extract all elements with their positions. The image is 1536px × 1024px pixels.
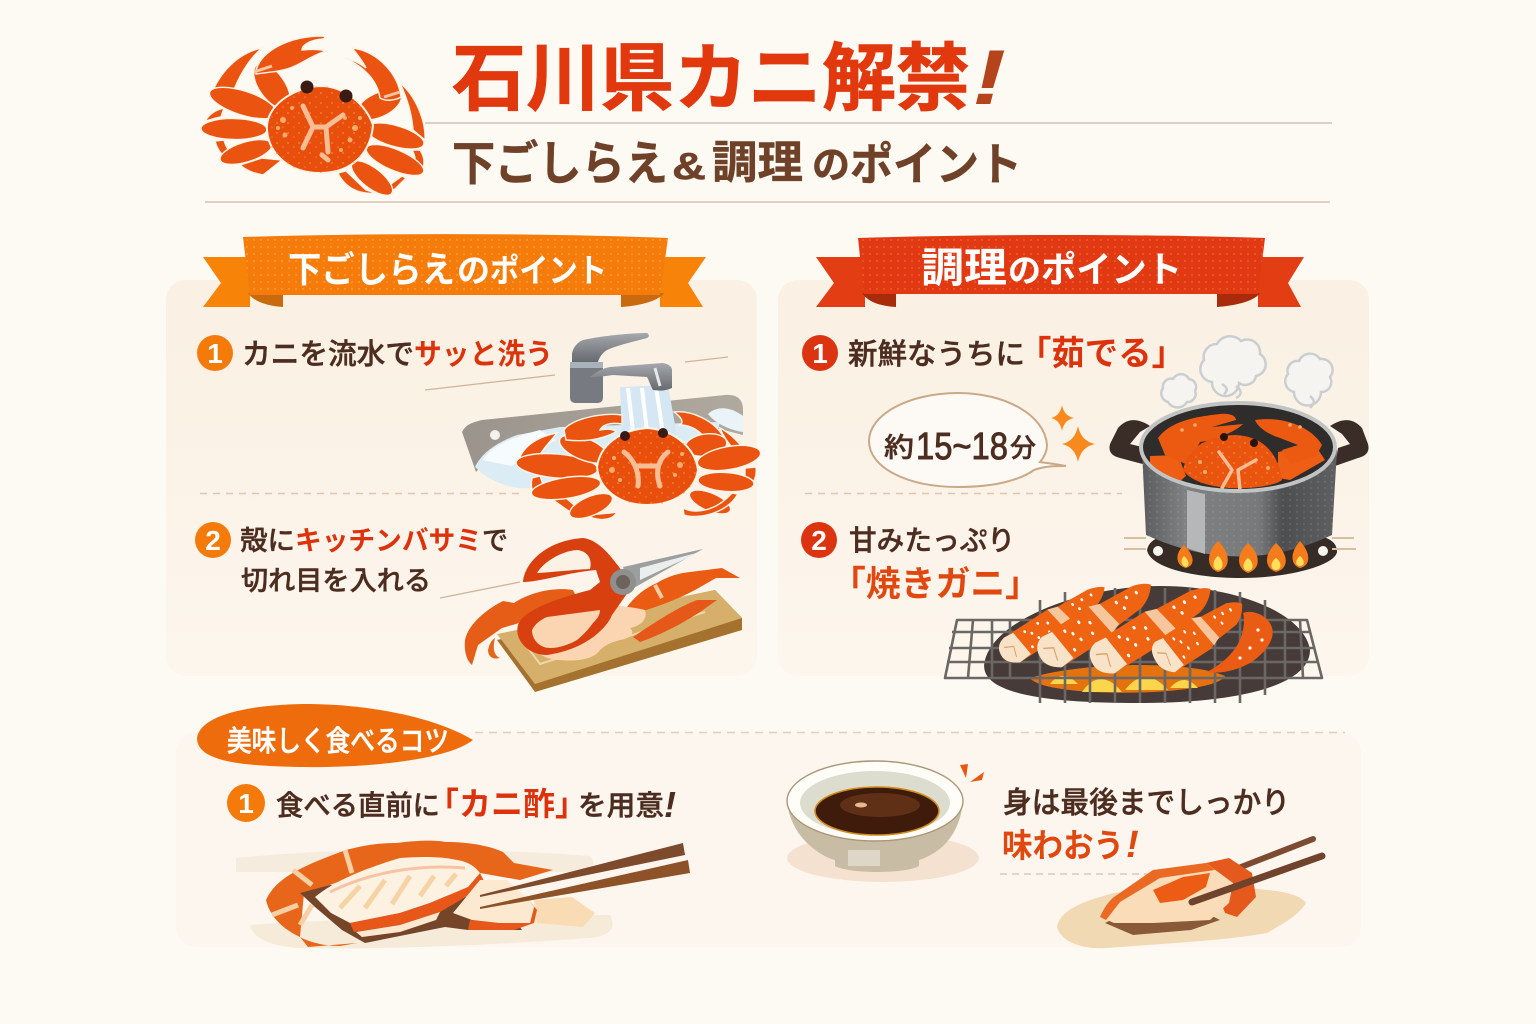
banner: cooking points: 調理: [921, 245, 1007, 291]
illustration: scissors cutting crab leg on board: [465, 538, 742, 692]
step 1: boil fresh: 1: [812, 338, 828, 369]
illustration: pot with boiling crab: [1109, 403, 1369, 556]
subtitle: ポイント: [850, 139, 1022, 190]
illustration: crab bite with chopsticks: [1057, 839, 1322, 948]
step: savour the meat: !: [1126, 824, 1139, 866]
step 2: grilled crab: 2: [811, 525, 827, 556]
illustration: crab meat with chopsticks: [236, 841, 690, 948]
illustration: sink: [462, 395, 743, 488]
subtitle: [452, 137, 1022, 190]
banner: cooking points: ポイント: [1041, 249, 1182, 290]
illustration: grilled crab legs on grate: [945, 572, 1322, 703]
icon: header crab: [201, 36, 428, 201]
step 2: cut shell: 切れ目を入れる: [241, 566, 431, 596]
step 1: rinse crab: [197, 335, 553, 371]
step 1: prepare crab vinegar: !: [664, 784, 676, 825]
illustration: burner with flames: [1124, 535, 1356, 578]
step 2: grilled crab: [801, 522, 1040, 604]
step 1: rinse crab: サッと洗う: [414, 338, 553, 371]
step 2: cut shell: 2: [205, 525, 221, 556]
subtitle: 下ごしらえ: [452, 137, 668, 190]
title: !: [972, 33, 1006, 121]
callout: boil time 15-18 minutes: 15~18: [916, 426, 1008, 468]
banner: preparation points: の: [457, 252, 490, 289]
step: savour the meat: [1002, 787, 1290, 866]
step 1: prepare crab vinegar: 1: [238, 788, 254, 819]
step 2: grilled crab: 「焼きガニ」: [831, 565, 1040, 604]
step 2: grilled crab: 甘みたっぷり: [849, 525, 1015, 556]
step 2: cut shell: [195, 522, 508, 596]
step 2: cut shell: で: [482, 526, 508, 556]
step 1: prepare crab vinegar: 「カニ酢」: [427, 786, 587, 822]
illustration: vinegar dish: [787, 761, 979, 882]
illustration: faucet with running water: [570, 333, 678, 442]
step: savour the meat: 身は最後までしっかり: [1003, 787, 1290, 820]
step 1: boil fresh: 新鮮なうちに: [848, 338, 1025, 371]
callout: boil time 15-18 minutes: [869, 393, 1066, 487]
step 1: prepare crab vinegar: [227, 784, 676, 825]
step 2: cut shell: 殻に: [240, 526, 295, 556]
banner: cooking points: の: [1008, 252, 1041, 289]
banner: cooking points: [816, 235, 1304, 307]
panel: cooking: [778, 280, 1369, 676]
step 1: rinse crab: 1: [207, 338, 223, 369]
step 1: boil fresh: [802, 335, 1185, 373]
subtitle: の: [812, 145, 850, 187]
callout: boil time 15-18 minutes: 分: [1010, 433, 1036, 463]
step 1: prepare crab vinegar: 食べる直前に: [276, 790, 440, 821]
icon: steam clouds: [1161, 336, 1333, 408]
step 1: rinse crab: カニを流水で: [242, 338, 414, 371]
banner: preparation points: [203, 234, 706, 307]
panel: preparation: [166, 280, 757, 676]
illustration: crab under water: [515, 412, 763, 524]
subtitle: 調理: [712, 137, 803, 188]
icon: flames: [1177, 541, 1308, 573]
heading pill: tips: [197, 704, 473, 767]
banner: preparation points: 下ごしらえ: [288, 249, 455, 290]
title: 石川県カニ解禁: [452, 37, 970, 120]
icon: emphasis ticks: [960, 764, 984, 782]
step 1: prepare crab vinegar: を用意: [578, 790, 664, 821]
step 2: cut shell: キッチンバサミ: [295, 526, 482, 556]
callout: boil time 15-18 minutes: 約: [884, 433, 914, 463]
subtitle: &: [672, 146, 706, 188]
banner: preparation points: ポイント: [490, 252, 607, 289]
step 1: boil fresh: 「茹でる」: [1018, 335, 1185, 373]
step: savour the meat: 味わおう: [1002, 827, 1124, 864]
icon: sparkles: [1051, 405, 1095, 462]
panel: tips for eating: [176, 732, 1361, 947]
heading pill: tips: 美味しく食べるコツ: [227, 725, 449, 758]
